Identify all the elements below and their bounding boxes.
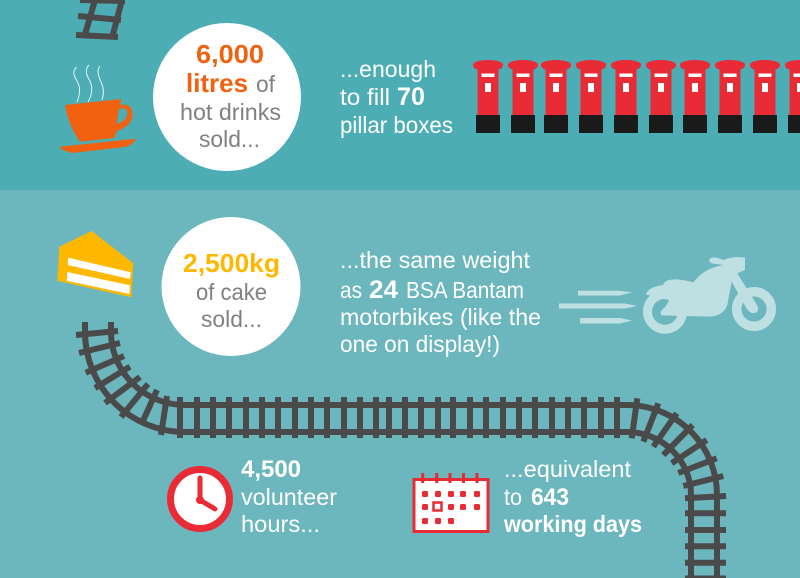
text: 4,500 volunteer hours: hours... [241, 511, 320, 537]
text: enough to fill 70 pillar boxes: to fill [340, 84, 390, 110]
railway track: main curved section [76, 322, 726, 578]
icon: orange teacup with steam [59, 65, 136, 153]
text: 4,500 volunteer hours: 4,500 [241, 456, 301, 483]
railway track: top fragment [76, 0, 125, 38]
text: same weight as 24 BSA Bantam motorbikes: as [340, 277, 362, 303]
text: equivalent to 643 working days: 643 [531, 484, 569, 511]
panel: hot drinks circle: hot drinks [180, 99, 281, 125]
text: same weight as 24 BSA Bantam motorbikes: one on display!) [340, 331, 500, 357]
icon: cake slice [57, 231, 133, 297]
panel: hot drinks circle: of [256, 71, 276, 97]
text: enough to fill 70 pillar boxes [340, 56, 453, 138]
panel: cake circle [162, 217, 300, 356]
panel: hot drinks circle: litres [186, 68, 248, 98]
text: same weight as 24 BSA Bantam motorbikes: 24 [369, 276, 398, 304]
panel: hot drinks circle: sold... [199, 126, 260, 152]
text: same weight as 24 BSA Bantam motorbikes: BSA Bantam [406, 277, 524, 303]
text: equivalent to 643 working days: to [504, 484, 522, 510]
panel: cake circle: 2,500kg [183, 248, 280, 278]
background: top band [0, 0, 800, 190]
panel: hot drinks circle [153, 23, 301, 171]
text: 4,500 volunteer hours: volunteer [241, 484, 337, 510]
text: same weight as 24 BSA Bantam motorbikes: ...the same weight [340, 247, 531, 273]
panel: hot drinks circle: 6,000 [196, 39, 264, 69]
text: 4,500 volunteer hours [241, 456, 337, 537]
text: same weight as 24 BSA Bantam motorbikes [340, 247, 541, 357]
background: bottom band [0, 190, 800, 578]
text: equivalent to 643 working days [503, 456, 642, 537]
text: enough to fill 70 pillar boxes: 70 [397, 83, 425, 111]
panel: cake circle: sold... [201, 306, 262, 332]
text: enough to fill 70 pillar boxes: ...enough [340, 56, 436, 82]
icon: calendar [414, 473, 488, 532]
text: same weight as 24 BSA Bantam motorbikes: motorbikes (like the [340, 304, 541, 330]
icon row: pillar boxes [473, 60, 800, 133]
text: enough to fill 70 pillar boxes: pillar boxes [340, 112, 453, 138]
panel: cake circle: of cake [196, 279, 267, 305]
icon: motorbike with speed lines [559, 257, 771, 329]
text: equivalent to 643 working days: working days [503, 511, 642, 537]
text: equivalent to 643 working days: ...equivalent [504, 456, 632, 482]
icon: clock [170, 470, 230, 528]
